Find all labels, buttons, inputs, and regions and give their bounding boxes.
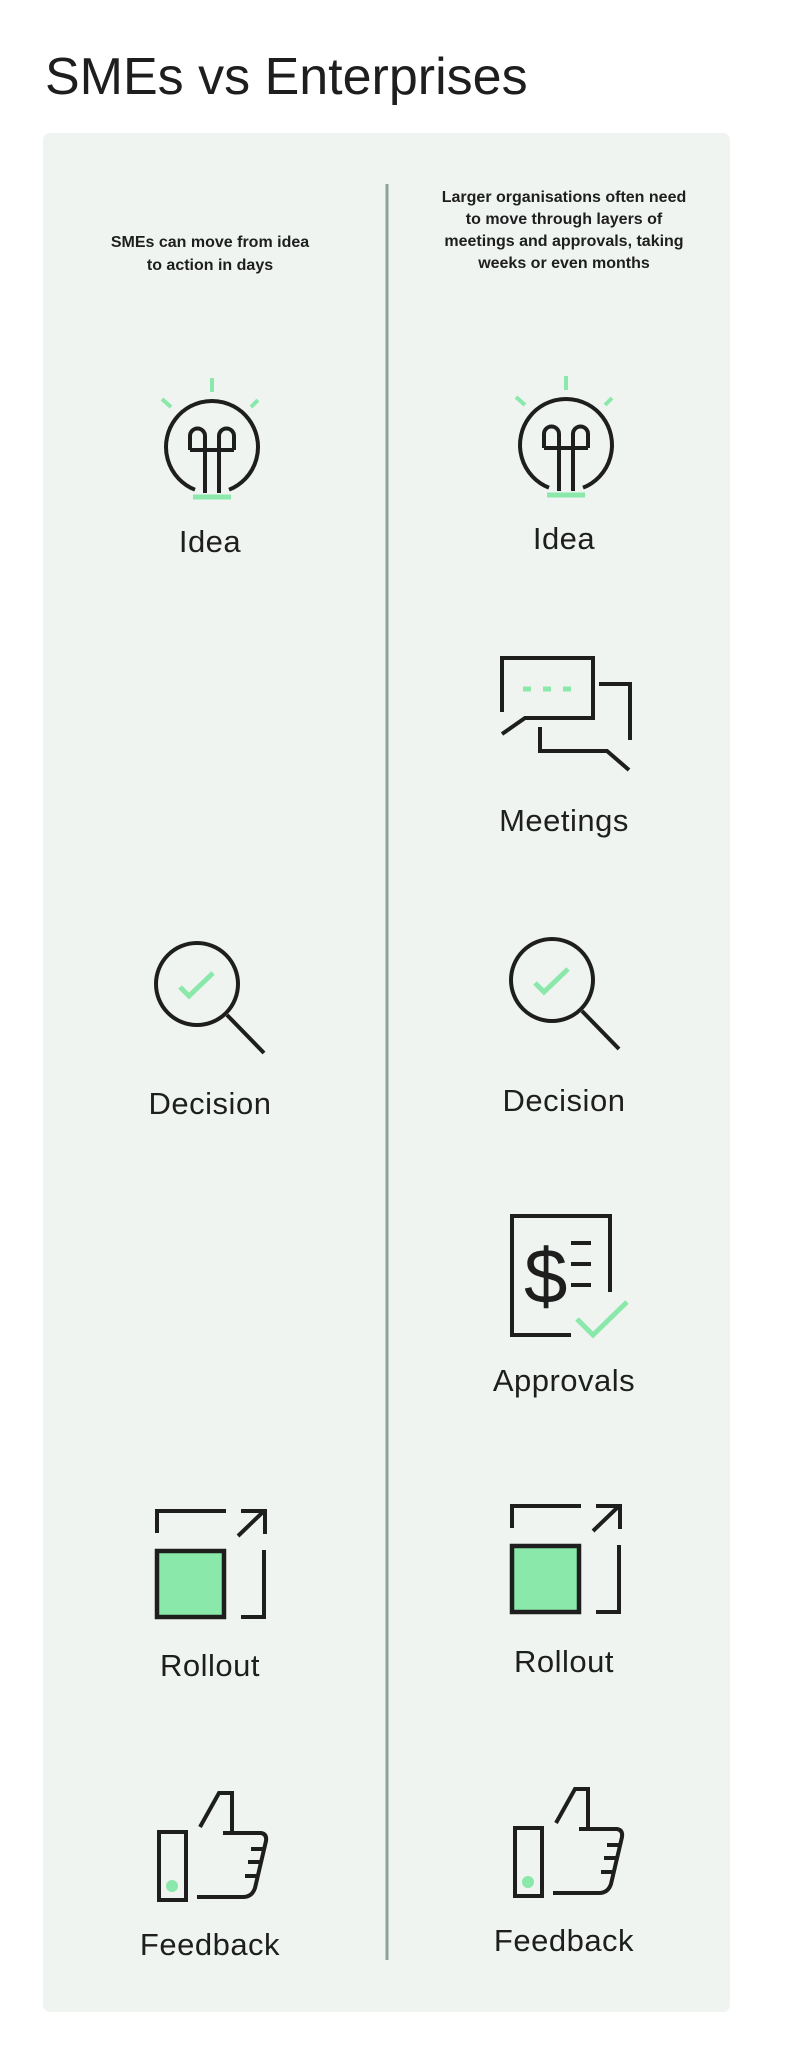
label: rollout (SMEs): Rollout xyxy=(160,1648,260,1683)
divider line xyxy=(386,184,388,1960)
icon: decision (SMEs) xyxy=(156,943,264,1053)
caption: enterprises: to move through layers of xyxy=(466,211,663,228)
label: meetings: Meetings xyxy=(499,803,629,838)
caption: enterprises: meetings and approvals, taking xyxy=(444,233,684,250)
label: rollout (enterprises): Rollout xyxy=(514,1644,614,1679)
caption: SMEs: SMEs can move from idea xyxy=(111,234,309,251)
label: idea (SMEs): Idea xyxy=(179,524,241,559)
icon: idea (enterprises) xyxy=(516,376,612,495)
label: feedback (enterprises): Feedback xyxy=(494,1923,634,1958)
icon: feedback (enterprises) xyxy=(515,1789,622,1896)
icon: meetings xyxy=(502,658,630,770)
icon: rollout (enterprises) xyxy=(512,1506,620,1612)
icon: decision (enterprises) xyxy=(511,939,619,1049)
label: idea (enterprises): Idea xyxy=(533,521,595,556)
icon: feedback (SMEs) xyxy=(159,1793,266,1900)
icon: idea (SMEs) xyxy=(162,378,258,497)
caption: enterprises: weeks or even months xyxy=(477,255,650,272)
label: approvals: Approvals xyxy=(493,1363,635,1398)
label: feedback (SMEs): Feedback xyxy=(140,1927,280,1962)
icon: approvals xyxy=(512,1216,627,1335)
caption: SMEs: to action in days xyxy=(147,257,273,274)
panel: comparison xyxy=(43,133,730,2012)
label: decision (SMEs): Decision xyxy=(149,1086,271,1121)
icon: rollout (SMEs) xyxy=(157,1511,265,1617)
icon: approvals: $ xyxy=(524,1232,567,1320)
caption: enterprises: Larger organisations often need xyxy=(442,189,686,206)
title: SMEs vs Enterprises xyxy=(45,48,528,106)
label: decision (enterprises): Decision xyxy=(503,1083,625,1118)
